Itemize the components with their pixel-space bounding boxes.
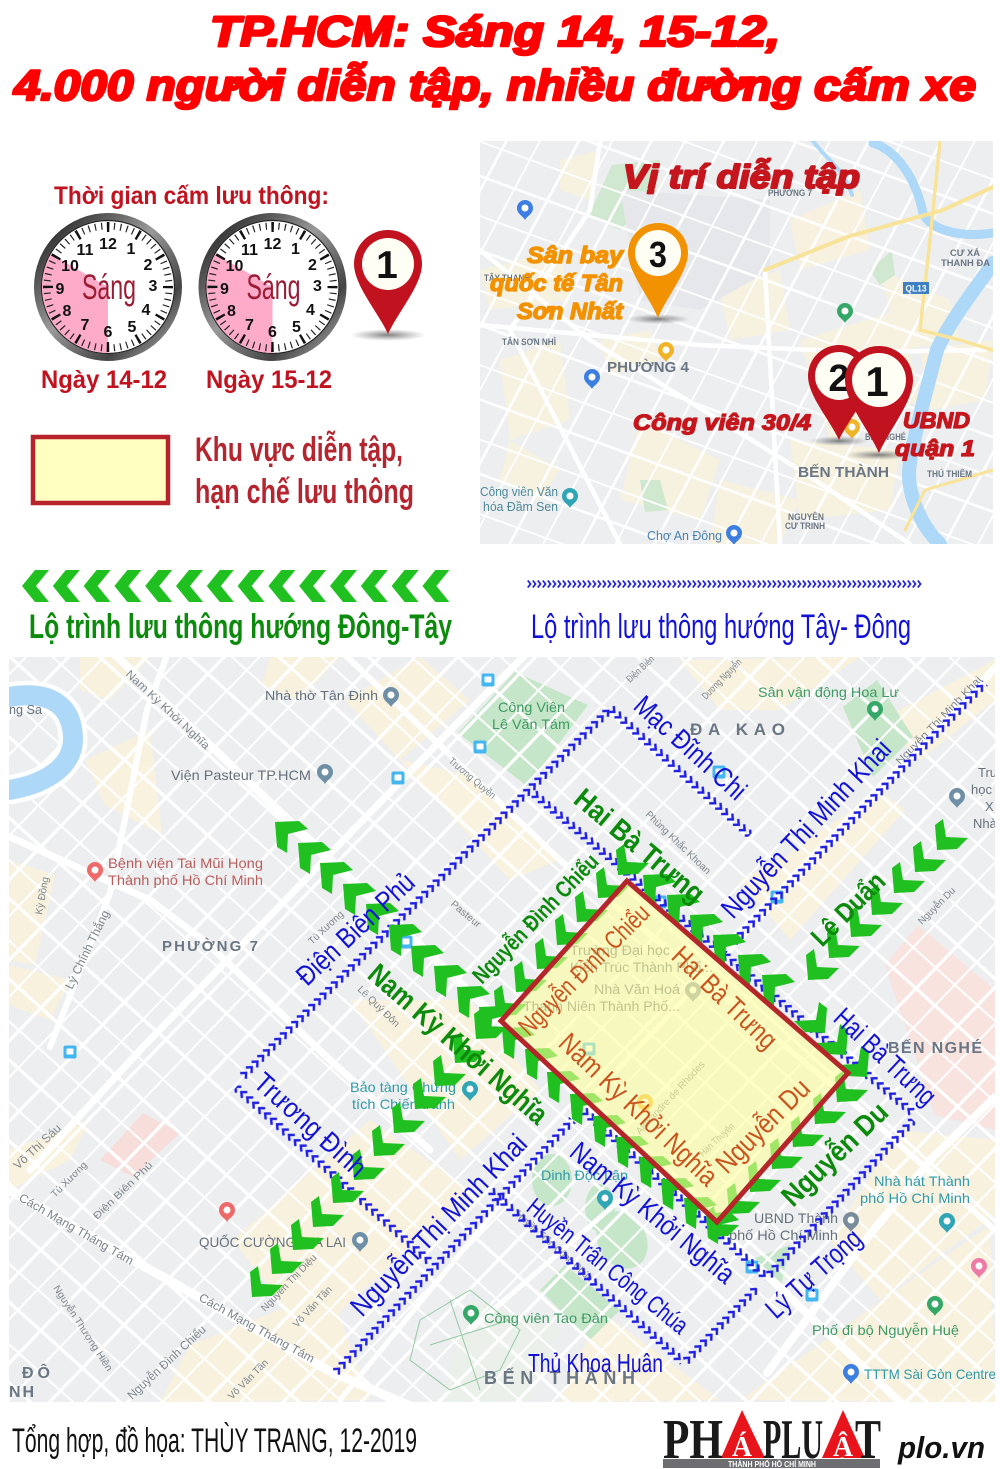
- map: traffic routes: Trư: [978, 765, 999, 780]
- labels: blue route streets: Điện Biên Phủ: [290, 866, 421, 991]
- clock: 15-12: Sáng: [246, 268, 300, 307]
- labels: streets inside zone: Nguyễn Đình Chiểu: [512, 898, 656, 1041]
- map: traffic routes: Cách Mạng Tháng Tám: [197, 1290, 317, 1366]
- clock: 14-12: Sáng: [82, 268, 136, 307]
- clock: 14-12: [38, 216, 178, 358]
- clock: 15-12: 12: [264, 236, 282, 253]
- map: drill locations: [480, 141, 993, 545]
- legend text: drill area: Khu vực diễn tập,: [195, 431, 403, 469]
- clock: 14-12: 1: [127, 241, 136, 258]
- map: traffic routes: Võ Thị Sáu: [10, 1121, 64, 1172]
- map: traffic routes: Thành phố Hồ Chí Minh: [108, 872, 263, 888]
- map: traffic routes: BẾN NGHÉ: [888, 1038, 982, 1057]
- clock: 15-12: 1: [291, 241, 300, 258]
- heading: banned time: Thời gian cấm lưu thông:: [54, 182, 329, 210]
- map: drill locations: PHƯỜNG 4: [607, 358, 690, 376]
- clock: 15-12: 5: [292, 319, 301, 336]
- label: district 1 people's committee: UBND: [903, 408, 970, 433]
- legend text: drill area: hạn chế lưu thông: [195, 473, 414, 511]
- map: drill locations: BẾN THÀNH: [798, 464, 889, 481]
- icon: pin 1: [845, 346, 913, 460]
- title: TP.HCM: Sáng 14, 15-12,: [210, 8, 780, 56]
- clock: 14-12: 7: [81, 317, 90, 334]
- map: traffic routes: Nguyễn Đình Chiểu: [124, 1322, 209, 1402]
- labels: blue route streets: Trương Đình: [248, 1066, 373, 1183]
- map: traffic routes: Lý Chính Thắng: [61, 907, 112, 991]
- map: traffic routes: Điện Biên Phủ: [91, 1159, 155, 1222]
- map: traffic routes: Pasteur: [448, 899, 483, 931]
- map: traffic routes: Tú Xương: [49, 1160, 90, 1200]
- labels: blue route streets: Huyền Trân Công Chúa: [521, 1193, 694, 1340]
- clock: 14-12: 4: [142, 302, 151, 319]
- labels: blue route streets: Nam Kỳ Khởi Nghĩa: [564, 1136, 741, 1290]
- map: traffic routes: Nguyễn Thị Minh Khai: [893, 673, 984, 767]
- map: traffic routes: Phùng Khắc Khoan: [643, 808, 714, 877]
- icon: pin 1 legend: 1: [376, 244, 398, 287]
- labels: green route streets: [361, 783, 895, 1213]
- map: traffic routes: Nhà Văn Hoá: [594, 981, 680, 997]
- map: traffic routes: Thanh Niên Thành Phố...: [523, 998, 680, 1014]
- map: traffic routes: BẾN THÀNH: [484, 1367, 635, 1388]
- map: traffic routes: ng Sa: [9, 702, 43, 717]
- map: traffic routes: Phố đi bộ Nguyễn Huệ: [812, 1322, 959, 1338]
- clock: 14-12: 11: [77, 242, 94, 259]
- map: traffic routes: QUỐC CƯỜNG GIA LAI: [199, 1233, 346, 1250]
- map: traffic routes: Kỳ Đồng: [33, 876, 52, 916]
- label: date 15-12: Ngày 15-12: [206, 366, 332, 394]
- icon: pin 3: 3: [649, 234, 667, 275]
- map: drill locations: Công viên Văn: [480, 485, 558, 499]
- clock: 14-12: 5: [128, 319, 137, 336]
- map: drill locations: Chợ An Đông: [647, 529, 722, 543]
- labels: blue route streets: [248, 689, 943, 1378]
- logo: plo.vn: plo.vn: [897, 1430, 985, 1465]
- label: park 30/4: Công viên 30/4: [633, 410, 811, 435]
- map: traffic routes: X: [985, 799, 994, 814]
- map: drill locations: NGUYÊN: [788, 511, 824, 523]
- labels: green route streets: Lê Duẩn: [805, 866, 891, 952]
- map: traffic routes: Nam Kỳ Khởi Nghĩa: [123, 668, 212, 753]
- labels: blue route streets: Nguyễn Thị Minh Khai: [344, 1128, 533, 1322]
- clock: 15-12: 11: [241, 242, 258, 259]
- map: traffic routes: ĐÔ: [22, 1363, 50, 1382]
- labels: green route streets: Nguyễn Du: [774, 1095, 895, 1213]
- map: traffic routes: Alexandre de Rhodes: [634, 1059, 708, 1137]
- map: traffic routes: NH: [9, 1384, 34, 1401]
- label: Tan Son Nhat airport: Sân bay: [527, 242, 624, 268]
- title: [13, 8, 976, 110]
- map: traffic routes: Lê Quý Đôn: [355, 984, 401, 1030]
- clock: 15-12: 3: [313, 278, 322, 295]
- map: traffic routes: Kiến Trúc Thành Phố...: [570, 959, 713, 975]
- map: traffic routes: Nhà thờ Tân Định: [265, 688, 378, 703]
- map: traffic routes: ĐA KAO: [690, 720, 785, 739]
- arrows legend: east-west: [22, 570, 453, 602]
- labels: green route streets: Nam Kỳ Khởi Nghĩa: [361, 958, 554, 1132]
- clock: 15-12: 7: [245, 317, 254, 334]
- clock: 15-12: 8: [227, 303, 236, 320]
- labels: green route streets: Nguyễn Đình Chiểu: [466, 847, 604, 988]
- clock: 15-12: 2: [308, 257, 317, 274]
- clock: 14-12: 12: [99, 236, 117, 253]
- map: traffic routes: Huyền Trân Công Chúa: [513, 1208, 596, 1284]
- map: traffic routes: Dinh Độc Lập: [541, 1167, 628, 1183]
- label: Tan Son Nhat airport: [490, 242, 624, 324]
- map: drill locations: CƯ XÁ: [950, 248, 980, 259]
- labels: streets inside zone: Nguyễn Du: [709, 1072, 816, 1179]
- labels: blue route streets: Mạc Đĩnh Chi: [628, 689, 753, 806]
- map: traffic routes: Nguyễn Du: [915, 884, 958, 927]
- map: traffic routes: Nhà: [973, 816, 998, 831]
- labels: blue route streets: Nguyễn Thị Minh Khai: [715, 733, 897, 924]
- map: traffic routes: Điện Biên: [625, 654, 657, 685]
- map: traffic routes: Công Viên: [498, 699, 565, 715]
- map: traffic routes: Nguyễn Thượng Hiền: [50, 1283, 116, 1374]
- logo: Pháp Luật: Á: [732, 1432, 753, 1463]
- map: traffic routes: Nhà hát Thành: [874, 1173, 970, 1189]
- labels: blue route streets: Thủ Khoa Huân: [528, 1348, 663, 1378]
- labels: streets inside zone: Nam Kỳ Khởi Nghĩa: [553, 1027, 724, 1192]
- map: traffic routes: Tú Xương: [307, 909, 346, 947]
- map: traffic routes: Trương Quyền: [446, 755, 498, 802]
- icon: pin 1: 1: [865, 358, 889, 405]
- labels: streets inside zone: [512, 898, 816, 1192]
- map: drill locations: BẾN NGHÉ: [865, 432, 906, 443]
- logo: Pháp Luật: [663, 1409, 881, 1469]
- logo: Pháp Luật: Ậ: [833, 1432, 854, 1463]
- map: traffic routes: Sân vận động Hoa Lư: [758, 684, 899, 700]
- icon: pin 3: [626, 223, 690, 324]
- map: traffic routes: PHƯỜNG 7: [162, 937, 258, 955]
- clock: 15-12: 9: [220, 281, 229, 298]
- map: drill locations: CƯ TRINH: [785, 521, 825, 532]
- labels: blue route streets: Hai Bà Trưng: [828, 1002, 943, 1112]
- map: traffic routes: tích Chiến tranh: [352, 1096, 455, 1112]
- legend: drill area box: [33, 437, 168, 503]
- routes: green east-west arrows: [250, 819, 968, 1297]
- map: traffic routes: Võ Văn Tần: [290, 1284, 335, 1330]
- map: traffic routes: Viện Pasteur TP.HCM: [171, 767, 311, 783]
- map: traffic routes: Cách Mạng Tháng Tám: [16, 1190, 136, 1268]
- label: Tan Son Nhat airport: Sơn Nhất: [517, 298, 624, 324]
- clock: 15-12: [202, 216, 343, 358]
- map: traffic routes: Bảo tàng Chứng: [350, 1079, 456, 1095]
- map: drill locations: TÂY THẠNH: [484, 272, 530, 284]
- logo: Pháp Luật: THÀNH PHỐ HỒ CHÍ MINH: [728, 1459, 816, 1469]
- clock: 15-12: 10: [226, 258, 244, 275]
- map: traffic routes: [9, 650, 999, 1410]
- labels: streets inside zone: Hai Bà Trưng: [666, 940, 784, 1055]
- labels: green route streets: Hai Bà Trưng: [568, 783, 711, 910]
- legend text: drill area: [195, 431, 414, 511]
- map: traffic routes: Võ Văn Tần: [226, 1357, 271, 1402]
- map: drill locations: QL13: [906, 284, 926, 294]
- map: traffic routes: Công viên Tao Đàn: [484, 1310, 608, 1326]
- map: traffic routes: phố Hồ Chí Minh: [729, 1227, 838, 1243]
- map: drill locations: THÚ THIÊM: [927, 468, 972, 480]
- clock: 14-12: 9: [56, 281, 65, 298]
- labels: blue route streets: Lý Tự Trọng: [759, 1222, 868, 1324]
- heading: drill locations: Vị trí diễn tập: [623, 158, 860, 195]
- label: district 1 people's committee: [895, 408, 975, 461]
- map: traffic routes: Lê Văn Tám: [492, 716, 570, 732]
- area: restricted drill zone: [501, 881, 848, 1222]
- label: date 14-12: Ngày 14-12: [41, 366, 167, 394]
- map: drill locations: TÂN SƠN NHÌ: [502, 336, 556, 348]
- map: drill locations: PHƯỜNG 7: [768, 187, 812, 198]
- clock: 15-12: 4: [306, 302, 315, 319]
- clock: 14-12: 2: [144, 257, 153, 274]
- map: traffic routes: UBND Thành: [754, 1210, 838, 1226]
- clock: 14-12: 8: [63, 303, 72, 320]
- legend text: east-west route: Lộ trình lưu thông hướng Đông-Tây: [29, 608, 452, 646]
- clock: 14-12: 3: [149, 278, 158, 295]
- label: Tan Son Nhat airport: quốc tế Tân: [490, 270, 623, 296]
- map: traffic routes: Dương Nguyễn: [699, 656, 744, 702]
- clock: 14-12: 6: [104, 324, 113, 341]
- map: drill locations: THANH ĐA: [941, 258, 990, 269]
- map: traffic routes: học: [971, 782, 992, 797]
- routes: blue west-east arrows: [232, 679, 989, 1377]
- arrows legend: west-east: [527, 579, 922, 589]
- icon: pin 2: [808, 345, 870, 446]
- credit line: Tổng hợp, đồ họa: THÙY TRANG, 12-2019: [12, 1422, 417, 1460]
- map: traffic routes: TTTM Sài Gòn Centre: [864, 1366, 996, 1382]
- title: 4.000 người diễn tập, nhiều đường cấm xe: [13, 61, 976, 110]
- clock: 15-12: 6: [268, 324, 277, 341]
- map: traffic routes: Hàn Thuyên: [698, 1121, 737, 1159]
- map: traffic routes: phố Hồ Chí Minh: [860, 1190, 970, 1206]
- map: traffic routes: Nguyễn Thị Diệu: [258, 1251, 319, 1314]
- map: drill locations: hóa Đầm Sen: [483, 500, 558, 514]
- map: traffic routes: Trường Đại học: [570, 942, 670, 958]
- label: district 1 people's committee: quận 1: [895, 436, 975, 461]
- icon: pin 2: 2: [828, 358, 850, 400]
- map: traffic routes: Bệnh viện Tai Mũi Họng: [108, 855, 263, 871]
- clock: 14-12: 10: [61, 258, 79, 275]
- icon: pin 1 legend: [350, 230, 426, 341]
